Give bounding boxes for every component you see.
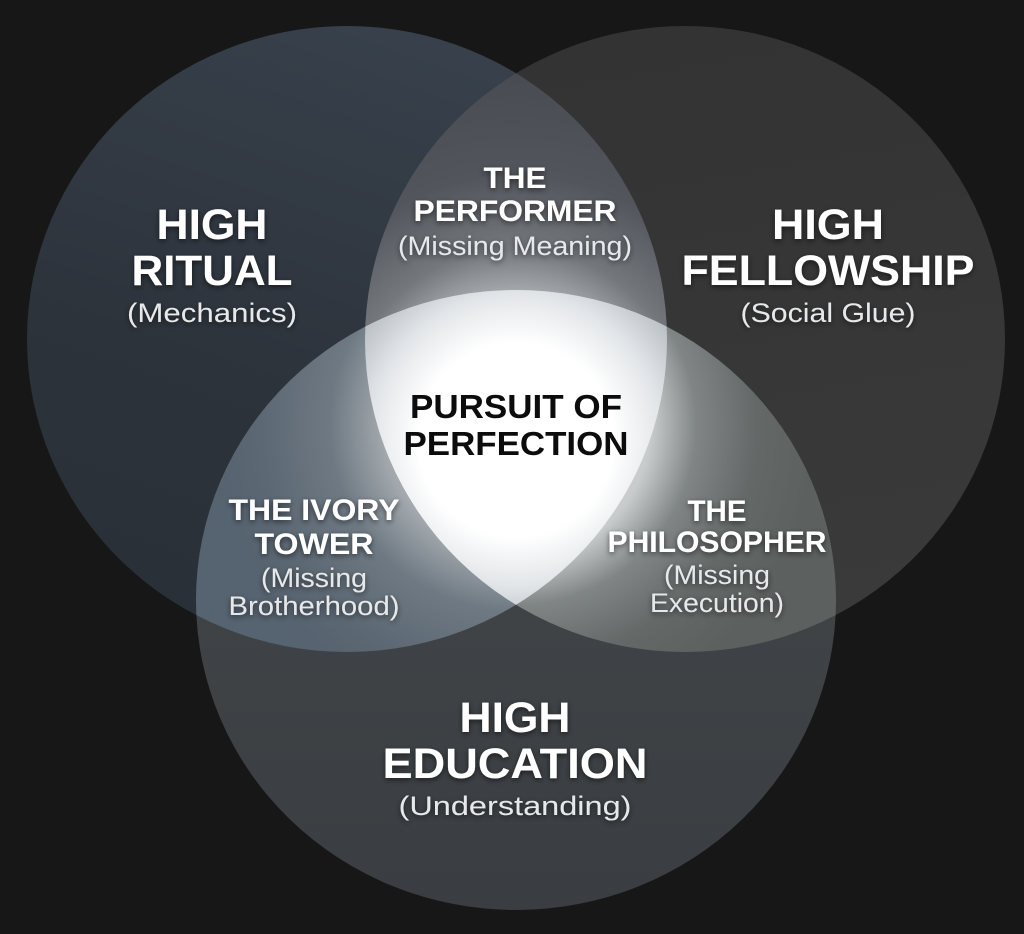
label: the ivory tower: (Missing xyxy=(261,563,367,593)
label: the philosopher xyxy=(608,495,827,618)
overlap: ritual and fellowship xyxy=(365,74,667,326)
label: the ivory tower: THE IVORY xyxy=(228,494,400,527)
label: high ritual xyxy=(127,201,297,328)
label: high education: (Understanding) xyxy=(398,791,632,821)
label: the performer: (Missing Meaning) xyxy=(398,231,632,261)
label: pursuit of perfection: PURSUIT OF xyxy=(410,388,622,425)
label: the philosopher: Execution) xyxy=(650,588,784,618)
label: high fellowship: FELLOWSHIP xyxy=(682,247,974,295)
circle: high education xyxy=(196,290,836,910)
label: the performer: THE xyxy=(484,162,546,195)
label: the philosopher: THE xyxy=(688,495,746,528)
label: high education xyxy=(382,694,648,821)
label: pursuit of perfection xyxy=(404,388,628,462)
label: high fellowship: (Social Glue) xyxy=(740,298,916,328)
center: pursuit of perfection xyxy=(365,290,667,605)
label: the philosopher: PHILOSOPHER xyxy=(608,526,827,559)
label: the ivory tower xyxy=(228,494,400,621)
label: high education: HIGH xyxy=(460,694,570,742)
overlap: ritual and education xyxy=(196,326,516,652)
label: the philosopher: (Missing xyxy=(664,560,770,590)
label: the ivory tower: Brotherhood) xyxy=(228,591,400,621)
label: the performer: PERFORMER xyxy=(414,195,617,228)
label: high ritual: HIGH xyxy=(156,201,268,249)
label: the performer xyxy=(398,162,632,261)
label: high fellowship: HIGH xyxy=(772,201,884,249)
label: high ritual: (Mechanics) xyxy=(127,298,297,328)
label: high ritual: RITUAL xyxy=(132,247,292,295)
circle: high fellowship xyxy=(365,26,1005,652)
label: high fellowship xyxy=(682,201,974,328)
label: high education: EDUCATION xyxy=(382,740,648,788)
label: pursuit of perfection: PERFECTION xyxy=(404,425,628,462)
label: the ivory tower: TOWER xyxy=(254,528,374,561)
overlap: fellowship and education xyxy=(373,290,836,652)
circle: high ritual xyxy=(27,26,667,652)
